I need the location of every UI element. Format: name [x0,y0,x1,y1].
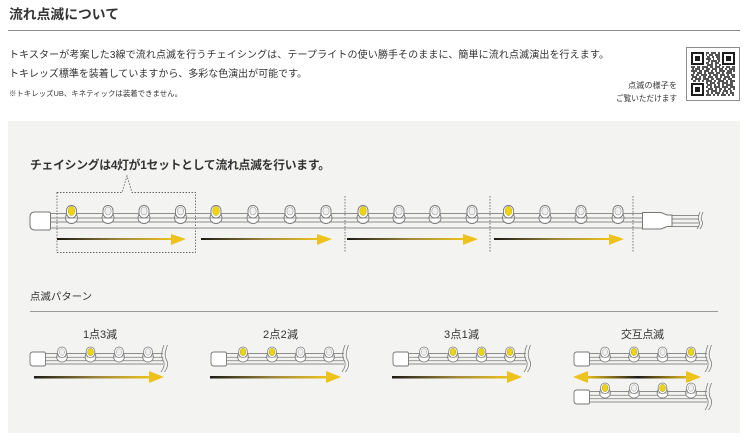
heading: blink patterns: 点滅パターン [30,291,92,303]
arrow: set 4 [494,234,624,245]
pattern: 2点2減 [210,327,349,383]
right connector [642,212,672,229]
callout: 4-lamp set dashed box [57,176,196,252]
text block: description: ※トキレッズUB、キネティックは装着できません。 [9,88,182,98]
arrow: set 1 [57,234,186,245]
pattern: 交互点滅 [573,328,712,410]
left connector [30,212,50,230]
pattern: 1点3減: 1点3減 [83,327,117,341]
panel: chasing diagram background [8,121,740,433]
text block: description [9,48,609,98]
pattern: 3点1減 [392,327,531,383]
QR note [616,80,677,103]
pattern: 1点3減 [30,327,168,383]
pattern: 交互点滅: 交互点滅 [621,328,664,341]
arrow: set 2 [201,234,332,245]
title: 流れ点滅について [9,7,119,22]
pattern: 2点2減: 2点2減 [263,327,298,341]
QR note: 点滅の様子を [628,80,677,90]
QR note: ご覧いただけます [616,93,677,103]
main LED strip [30,206,703,230]
text block: description: トキスターが考案した3線で流れ点滅を行うチェイシングは、テープライトの使い勝手そのままに、簡単に流れ点滅演出を行えます。 [9,48,609,61]
icon: QR code [686,48,740,100]
set dividers [345,196,633,252]
arrow: set 3 [347,234,478,245]
heading: chasing: チェイシングは4灯が1セットとして流れ点滅を行います。 [30,158,330,172]
text block: description: トキレッズ標準を装着していますから、多彩な色演出が可能です。 [9,67,307,80]
pattern: 3点1減: 3点1減 [444,327,479,341]
